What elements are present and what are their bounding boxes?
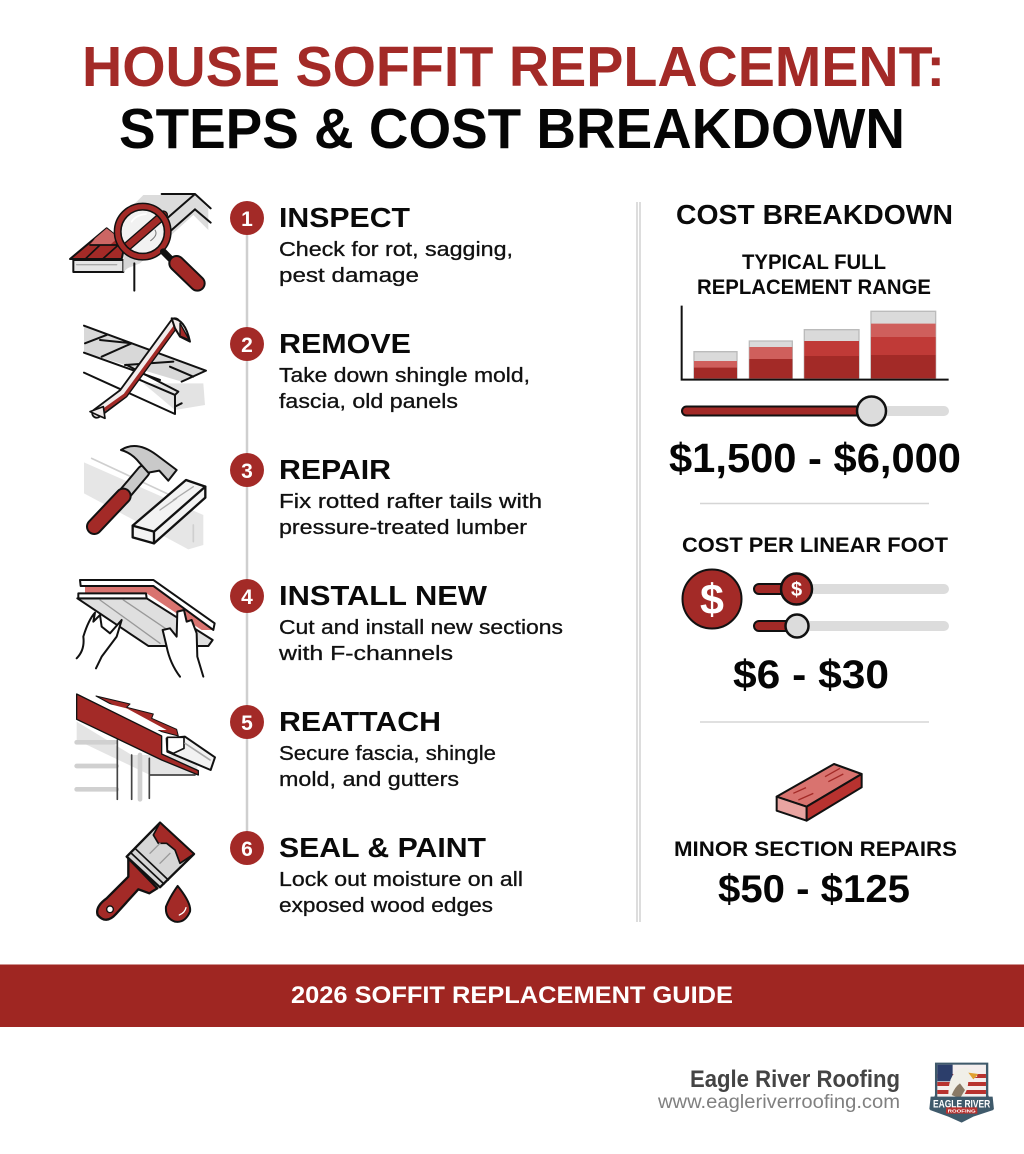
description: install new: Cut and install new sections bbox=[279, 617, 563, 639]
number badge 4: 4 bbox=[241, 586, 253, 609]
number badge 5: 5 bbox=[241, 712, 253, 735]
icon: dollar coin bbox=[682, 570, 742, 628]
heading: install new: INSTALL NEW bbox=[279, 580, 488, 611]
icon: paint brush and drop bbox=[97, 823, 194, 922]
heading: seal and paint: SEAL & PAINT bbox=[279, 832, 486, 863]
description: seal and paint: exposed wood edges bbox=[279, 895, 493, 917]
heading: inspect: INSPECT bbox=[279, 202, 410, 233]
footer brand text: www.eagleriverroofing.com bbox=[657, 1092, 900, 1113]
description: repair: pressure-treated lumber bbox=[279, 517, 527, 539]
icon: fascia and gutter bbox=[77, 694, 215, 799]
logo: eagle river roofing badge: EAGLE RIVER bbox=[933, 1098, 990, 1110]
icon: roof under magnifying glass bbox=[70, 194, 211, 291]
range slider bbox=[681, 396, 949, 426]
subheading: typical full replacement range: REPLACEMENT RANGE bbox=[697, 276, 931, 299]
description: seal and paint bbox=[279, 869, 523, 917]
icon: pry bar on shingles bbox=[84, 318, 206, 418]
number badge 4 bbox=[230, 579, 264, 613]
banner bbox=[0, 964, 1024, 1027]
value: full replacement range: $1,500 - $6,000 bbox=[669, 435, 961, 481]
number badge 2 bbox=[230, 327, 264, 361]
step 4: install new bbox=[77, 579, 563, 677]
description: install new bbox=[278, 617, 563, 665]
number badge 1 bbox=[230, 201, 264, 235]
icon: lumber piece bbox=[777, 764, 862, 821]
per-foot sliders with dollar icon: $ bbox=[791, 579, 802, 601]
logo: eagle river roofing badge bbox=[929, 1063, 994, 1123]
heading: repair: REPAIR bbox=[279, 454, 391, 485]
number badge 2: 2 bbox=[241, 334, 253, 357]
description: repair: Fix rotted rafter tails with bbox=[279, 491, 542, 513]
description: install new: with F-channels bbox=[278, 643, 453, 665]
step 5: reattach bbox=[77, 694, 496, 799]
step 3: repair bbox=[84, 446, 542, 549]
logo: eagle river roofing badge: ROOFING bbox=[948, 1108, 976, 1114]
title: HOUSE SOFFIT REPLACEMENT: bbox=[82, 35, 945, 99]
heading: remove: REMOVE bbox=[279, 328, 411, 359]
step timeline line bbox=[246, 218, 248, 848]
description: reattach: mold, and gutters bbox=[279, 769, 459, 791]
footer brand text: Eagle River Roofing bbox=[690, 1066, 900, 1093]
icon: dollar coin: $ bbox=[700, 576, 724, 624]
footer brand text bbox=[657, 1066, 900, 1113]
number badge 3 bbox=[230, 453, 264, 487]
description: seal and paint: Lock out moisture on all bbox=[279, 869, 523, 891]
column divider bbox=[637, 202, 640, 922]
icon: hammer and lumber bbox=[84, 446, 205, 549]
value: cost per linear foot: $6 - $30 bbox=[733, 653, 889, 697]
bar chart bbox=[682, 306, 949, 380]
number badge 1: 1 bbox=[241, 208, 253, 231]
step 6: seal and paint bbox=[97, 823, 523, 922]
subheading: typical full replacement range: TYPICAL FULL bbox=[742, 251, 886, 274]
subheading: minor section repairs: MINOR SECTION REPAIRS bbox=[674, 838, 957, 861]
number badge 6 bbox=[230, 831, 264, 865]
banner: 2026 SOFFIT REPLACEMENT GUIDE bbox=[291, 982, 733, 1009]
title: STEPS & COST BREAKDOWN bbox=[119, 97, 905, 161]
number badge 3: 3 bbox=[241, 460, 253, 483]
description: remove: Take down shingle mold, bbox=[279, 365, 530, 387]
step 1: inspect bbox=[70, 194, 513, 291]
title bbox=[82, 35, 945, 161]
description: inspect: Check for rot, sagging, bbox=[279, 239, 513, 261]
value: minor section repairs: $50 - $125 bbox=[718, 868, 910, 911]
subheading: typical full replacement range bbox=[697, 251, 931, 299]
heading: reattach: REATTACH bbox=[279, 706, 441, 737]
number badge 6: 6 bbox=[241, 838, 253, 861]
icon: hands installing soffit panel bbox=[77, 580, 215, 677]
per-foot sliders with dollar icon bbox=[682, 570, 949, 638]
subheading: cost per linear foot: COST PER LINEAR FOOT bbox=[682, 534, 948, 557]
description: reattach bbox=[279, 743, 496, 791]
heading: cost breakdown: COST BREAKDOWN bbox=[676, 199, 953, 230]
number badge 5 bbox=[230, 705, 264, 739]
description: remove bbox=[279, 365, 530, 413]
panel: cost breakdown bbox=[669, 199, 961, 911]
step 2: remove bbox=[84, 318, 530, 418]
description: repair bbox=[279, 491, 542, 539]
description: inspect: pest damage bbox=[279, 265, 419, 287]
description: reattach: Secure fascia, shingle bbox=[279, 743, 496, 765]
description: remove: fascia, old panels bbox=[279, 391, 458, 413]
description: inspect bbox=[279, 239, 513, 287]
